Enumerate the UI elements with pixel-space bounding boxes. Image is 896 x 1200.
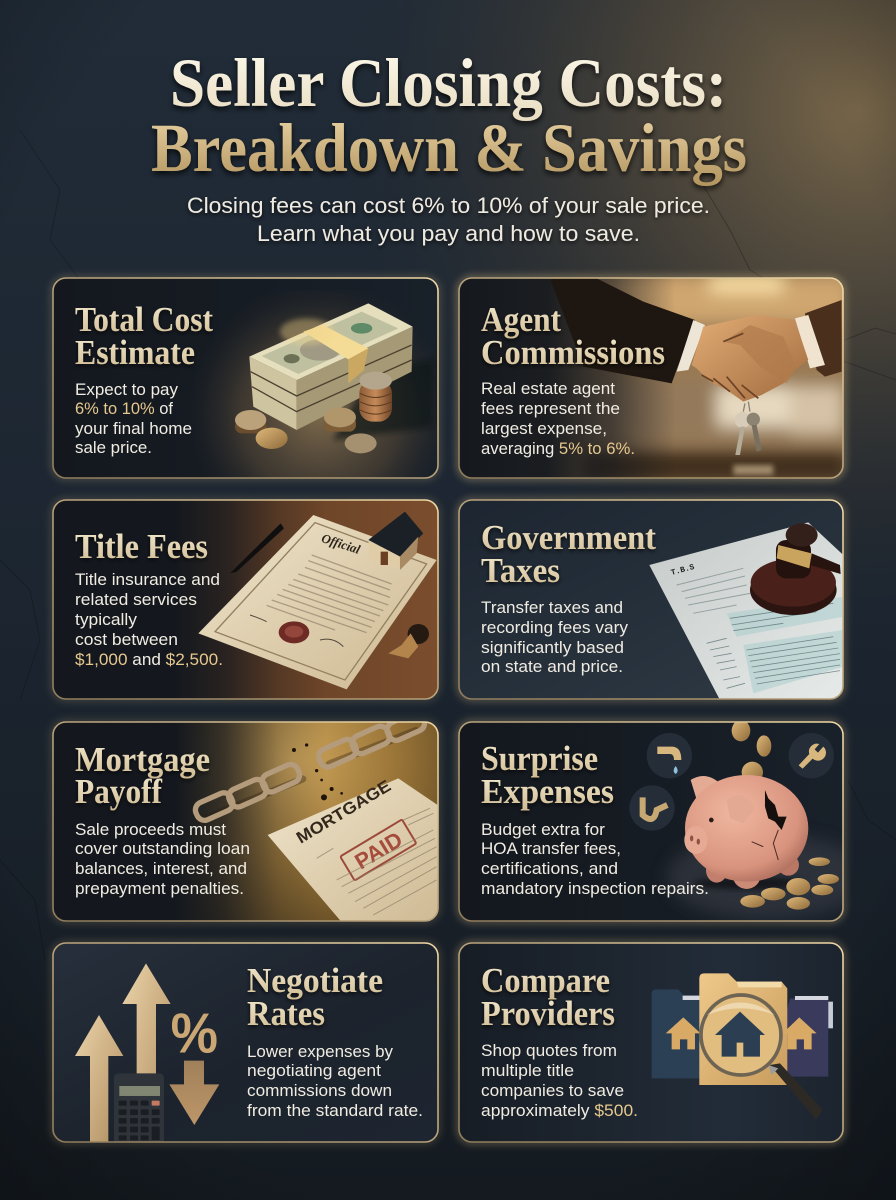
text block: 6% to 10% of — [75, 399, 173, 418]
card glow — [459, 500, 843, 699]
icon: handshake with keys — [550, 278, 842, 455]
card glow — [459, 722, 843, 921]
panel: government taxes — [459, 500, 843, 700]
text block: Budget extra for — [481, 820, 605, 839]
panel: compare providers — [459, 943, 843, 1142]
text block — [481, 820, 709, 898]
border — [459, 943, 843, 1142]
card glow — [459, 943, 843, 1142]
icon: falling coins — [732, 722, 772, 777]
text block — [75, 570, 223, 669]
text block: Sale proceeds must — [75, 820, 226, 839]
text block: averaging 5% to 6%. — [481, 439, 635, 458]
subtitle — [187, 193, 710, 246]
border — [459, 722, 843, 921]
panel: agent commissions — [450, 270, 860, 490]
heading — [247, 961, 383, 1033]
heading — [481, 300, 665, 372]
card glow — [53, 500, 438, 699]
border — [459, 278, 843, 478]
text block: approximately $500. — [481, 1101, 638, 1120]
panel: mortgage payoff — [40, 710, 450, 930]
icon: tax form with gavel — [649, 522, 843, 700]
heading: Compare — [481, 961, 610, 1000]
text block — [247, 1042, 423, 1120]
title — [151, 45, 747, 186]
heading — [75, 300, 213, 372]
heading: Mortgage — [75, 740, 210, 779]
text block — [75, 820, 250, 898]
panel: total cost estimate — [53, 278, 440, 480]
text block: Lower expenses by — [247, 1042, 393, 1061]
border — [53, 500, 438, 699]
text block — [481, 598, 628, 676]
heading — [481, 961, 615, 1033]
heading: Rates — [247, 994, 325, 1033]
text block: balances, interest, and — [75, 859, 247, 878]
card glow — [53, 278, 438, 478]
subtitle: Closing fees can cost 6% to 10% of your sale price. — [187, 193, 710, 218]
icon: folders with magnifying glass and houses — [652, 973, 833, 1119]
text block — [481, 1041, 638, 1120]
heading: Negotiate — [247, 961, 383, 1000]
border — [53, 278, 438, 478]
heading: Payoff — [75, 772, 162, 811]
panel: negotiate rates — [53, 943, 438, 1150]
text block: Title insurance and — [75, 570, 220, 589]
icon: up arrows, percent, down arrow and calculator: % — [171, 1003, 218, 1066]
icon: sink trap pipe — [629, 785, 675, 831]
icon: broken chain and paid document — [192, 722, 438, 920]
title: Breakdown & Savings — [151, 110, 747, 186]
heading: Government — [481, 518, 656, 557]
heading — [481, 739, 614, 811]
text block: prepayment penalties. — [75, 879, 244, 898]
text block: Transfer taxes and — [481, 598, 623, 617]
text block: sale price. — [75, 438, 152, 457]
text block: companies to save — [481, 1081, 624, 1100]
card glow — [53, 722, 438, 921]
text block — [481, 379, 635, 458]
text block: multiple title — [481, 1061, 574, 1080]
icon: title document with seal, house, pen — [198, 512, 437, 689]
border — [53, 943, 438, 1142]
heading — [481, 518, 656, 590]
text block: mandatory inspection repairs. — [481, 879, 709, 898]
heading: Estimate — [75, 333, 195, 372]
icon: wrench — [789, 733, 834, 778]
text block: commissions down — [247, 1081, 392, 1100]
heading: Agent — [481, 300, 561, 339]
text block: certifications, and — [481, 859, 618, 878]
title: Seller Closing Costs: — [170, 45, 727, 121]
heading: Title Fees — [75, 527, 208, 566]
text block: Expect to pay — [75, 380, 178, 399]
text block: largest expense, — [481, 419, 607, 438]
text block — [75, 380, 192, 457]
text block: cost between — [75, 630, 178, 649]
heading: Providers — [481, 994, 615, 1033]
text block: Shop quotes from — [481, 1041, 617, 1060]
heading: Surprise — [481, 739, 598, 778]
blurred office background — [583, 273, 850, 483]
icon: coin pile — [740, 857, 839, 910]
text block: related services — [75, 590, 197, 609]
subtitle: Learn what you pay and how to save. — [257, 221, 640, 246]
icon: up arrows, percent, down arrow and calculator — [75, 963, 219, 1150]
icon: leaking faucet — [647, 733, 692, 778]
text block: fees represent the — [481, 399, 620, 418]
text block: cover outstanding loan — [75, 839, 250, 858]
text block: negotiating agent — [247, 1061, 381, 1080]
heading: Expenses — [481, 772, 614, 811]
heading: Taxes — [481, 551, 560, 590]
text block: significantly based — [481, 638, 624, 657]
icon: cracked piggy bank — [684, 775, 808, 889]
card glow — [53, 943, 438, 1142]
border — [459, 500, 843, 699]
panel: surprise expenses — [459, 720, 867, 921]
icon: broken chain and paid document: MORTGAGE — [293, 776, 394, 847]
heading: Total Cost — [75, 300, 213, 339]
text block: Real estate agent — [481, 379, 615, 398]
icon: tax form with gavel: T.B.S — [670, 563, 696, 578]
panel: title fees — [40, 490, 450, 710]
heading — [75, 740, 210, 811]
text block: from the standard rate. — [247, 1101, 423, 1120]
heading: Commissions — [481, 333, 665, 372]
text block: HOA transfer fees, — [481, 839, 621, 858]
text block: $1,000 and $2,500. — [75, 650, 223, 669]
text block: on state and price. — [481, 657, 623, 676]
card glow — [459, 278, 843, 478]
text block: recording fees vary — [481, 618, 628, 637]
text block: your final home — [75, 419, 192, 438]
icon: title document with seal, house, pen: Official — [320, 531, 362, 557]
icon: broken chain and paid document: PAID — [350, 827, 407, 874]
text block: typically — [75, 610, 138, 629]
border — [53, 722, 438, 921]
icon: cash stack and coins — [235, 303, 433, 453]
